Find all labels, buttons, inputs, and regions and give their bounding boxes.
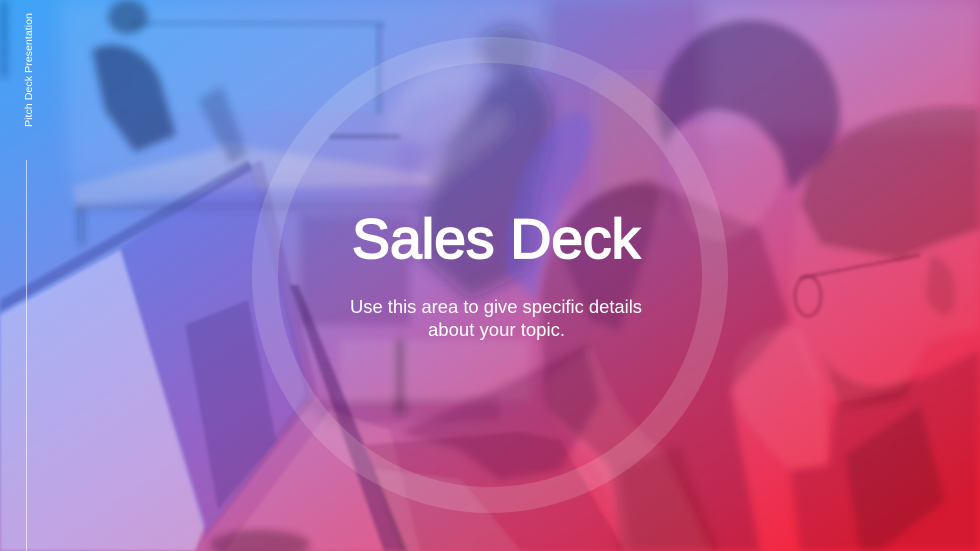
man: glasses	[795, 255, 920, 316]
blue chair back	[505, 112, 591, 300]
sidebar label: Pitch Deck Presentation	[23, 13, 35, 127]
woman: body	[540, 180, 790, 551]
desk	[72, 86, 430, 245]
subtitle: about your topic.	[428, 320, 565, 340]
seated person in the background	[385, 26, 552, 300]
woman: hair	[656, 20, 840, 190]
office chair	[0, 0, 176, 152]
woman: face	[668, 123, 783, 242]
subtitle	[350, 297, 642, 340]
office background wall	[60, 0, 980, 220]
man: head and skin	[792, 107, 980, 410]
rear monitor	[130, 20, 400, 139]
title: Sales Deck	[352, 207, 641, 270]
subtitle: Use this area to give specific details	[350, 297, 642, 317]
foreground monitor	[0, 160, 318, 551]
sidebar vertical line	[26, 160, 27, 551]
man: body	[620, 350, 980, 551]
laptop	[290, 285, 625, 551]
chair stand and floor	[300, 215, 530, 425]
mouse	[210, 530, 310, 551]
woman: arm and hands on laptop	[400, 345, 600, 480]
table surface	[225, 410, 420, 551]
ring: large translucent circle	[265, 50, 715, 500]
man: hand	[733, 327, 830, 470]
